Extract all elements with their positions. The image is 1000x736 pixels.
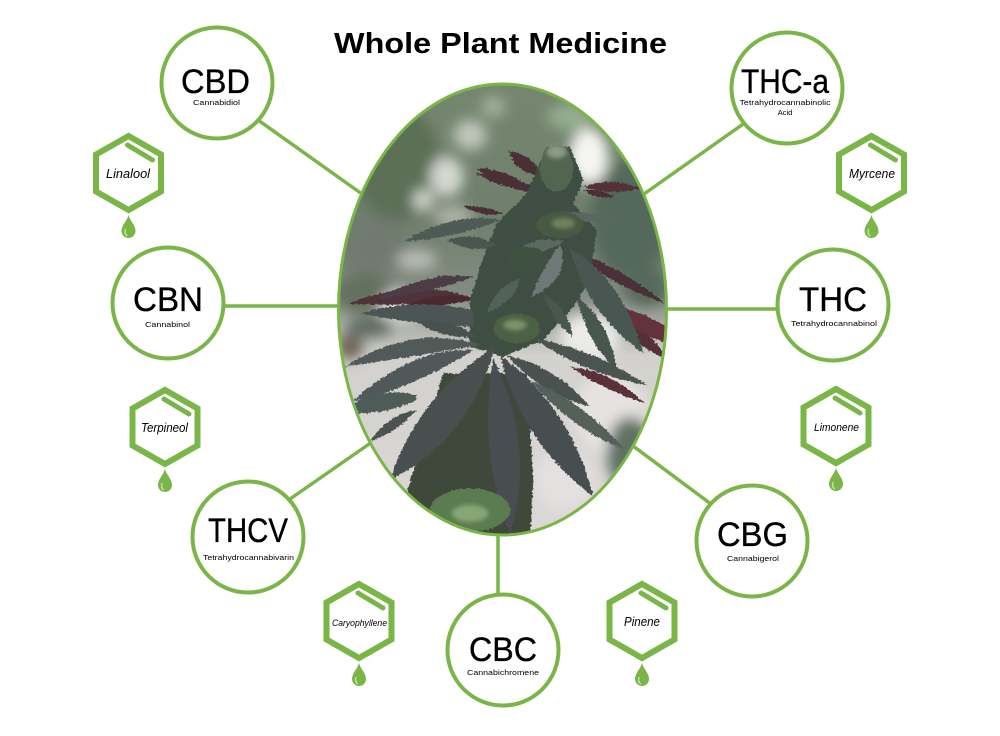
buds (430, 145, 583, 532)
upper leaves (403, 212, 643, 370)
cannabinoid: THC-a (732, 32, 842, 144)
cannabinoid: CBG: CBG (717, 516, 788, 554)
terpene: Terpineol (132, 390, 198, 492)
cannabinoid: THC (778, 250, 888, 360)
cannabinoid: THC-a: Acid (778, 108, 792, 117)
cannabinoid: CBN (112, 248, 224, 358)
terpene: Myrcene: Myrcene (849, 167, 895, 181)
cannabinoid: THC: THC (799, 281, 867, 319)
cannabinoid: CBC: Cannabichromene (467, 668, 539, 677)
cannabinoid: CBC (448, 594, 558, 706)
plant central mass (407, 147, 597, 540)
cannabinoid: THCV: THCV (208, 512, 288, 550)
terpene: Pinene: Pinene (624, 615, 660, 629)
cannabinoid: CBC: CBC (469, 631, 537, 669)
cannabinoid: THCV (192, 482, 304, 592)
cannabinoid: THC: Tetrahydrocannabinol (791, 319, 877, 328)
terpene: Caryophyllene (326, 584, 392, 686)
terpene: Myrcene (839, 136, 904, 238)
lower fan leaves (345, 304, 647, 535)
purple back leaves (350, 152, 668, 403)
terpene: Linalool: Linalool (106, 167, 151, 181)
cannabinoid: CBD: Cannabidiol (193, 98, 240, 107)
terpene: Limonene (804, 389, 868, 491)
cannabinoid: CBD (162, 28, 272, 138)
cannabinoid: CBN: Cannabinol (145, 320, 190, 329)
terpene: Limonene: Limonene (814, 422, 859, 434)
central plant photo oval (330, 80, 673, 540)
cannabinoid: CBG: Cannabigerol (727, 554, 779, 563)
cannabinoid: CBG (696, 486, 808, 596)
terpene: Linalool (96, 136, 161, 238)
cannabinoid: CBN: CBN (133, 281, 203, 319)
terpene: Caryophyllene: Caryophyllene (332, 618, 387, 628)
title: Whole Plant Medicine (334, 28, 667, 60)
cannabinoid: CBD: CBD (181, 63, 250, 101)
cannabinoid: THC-a: Tetrahydrocannabinolic (740, 98, 831, 107)
cannabinoid: THC-a: THC-a (741, 63, 829, 101)
connector lines (224, 120, 778, 597)
cannabinoid: THCV: Tetrahydrocannabivarin (203, 553, 294, 562)
terpene: Terpineol: Terpineol (141, 421, 189, 435)
terpene: Pinene (610, 584, 674, 686)
